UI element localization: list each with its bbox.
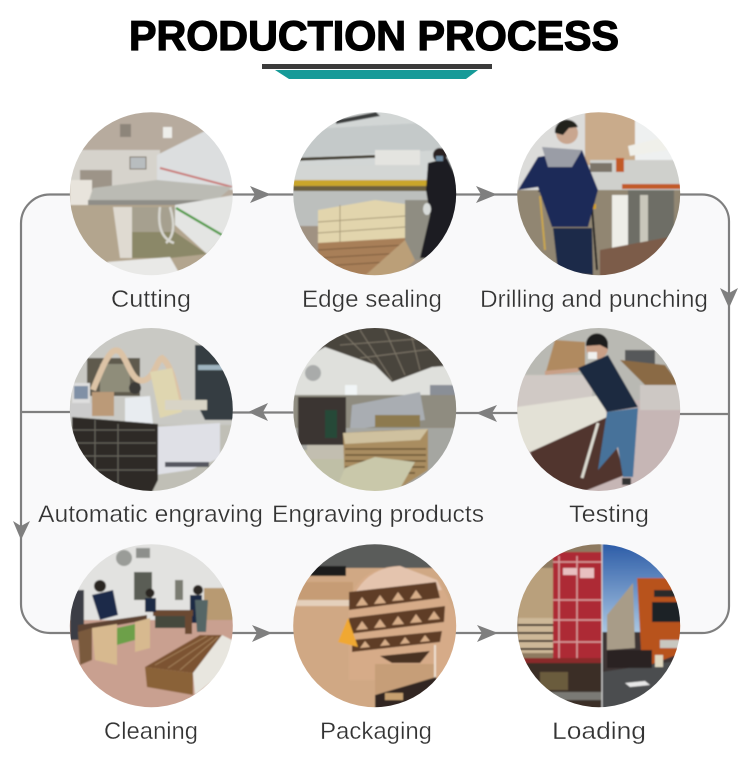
label: Loading: Loading — [552, 718, 646, 745]
photo: cleaning — [68, 542, 234, 710]
label: Cleaning: Cleaning — [104, 718, 198, 745]
arrow: testing to engraving products — [476, 405, 497, 422]
photo: engraving products — [291, 326, 463, 496]
label: Cutting: Cutting — [111, 286, 191, 313]
photo: packaging — [291, 542, 463, 712]
panel: loop background — [21, 194, 729, 633]
label: Drilling and punching: Drilling and punching — [480, 286, 708, 313]
flow connector lines — [21, 194, 729, 633]
photo: testing — [515, 326, 683, 495]
arrow: packaging to loading — [477, 625, 498, 642]
label: Edge sealing: Edge sealing — [302, 286, 442, 313]
label: Automatic engraving: Automatic engraving — [38, 501, 263, 528]
photo: edge sealing — [291, 110, 463, 280]
photo: drilling and punching — [515, 110, 683, 280]
title underline ornament — [262, 64, 492, 79]
arrow: down left side — [13, 521, 30, 540]
label: Packaging: Packaging — [320, 718, 432, 745]
photo: cutting — [68, 110, 234, 280]
arrow: cleaning to packaging — [252, 625, 272, 642]
photo: automatic engraving — [68, 326, 234, 495]
arrow: engraving products to automatic engraving — [248, 403, 268, 421]
label: Engraving products: Engraving products — [272, 501, 484, 528]
arrow: down right side — [720, 288, 738, 308]
arrow: cutting to edge sealing — [250, 186, 271, 203]
label: Testing: Testing — [569, 501, 649, 528]
arrow: edge sealing to drilling — [476, 186, 497, 203]
photo: loading — [515, 542, 684, 713]
title: PRODUCTION PROCESS — [129, 12, 619, 59]
